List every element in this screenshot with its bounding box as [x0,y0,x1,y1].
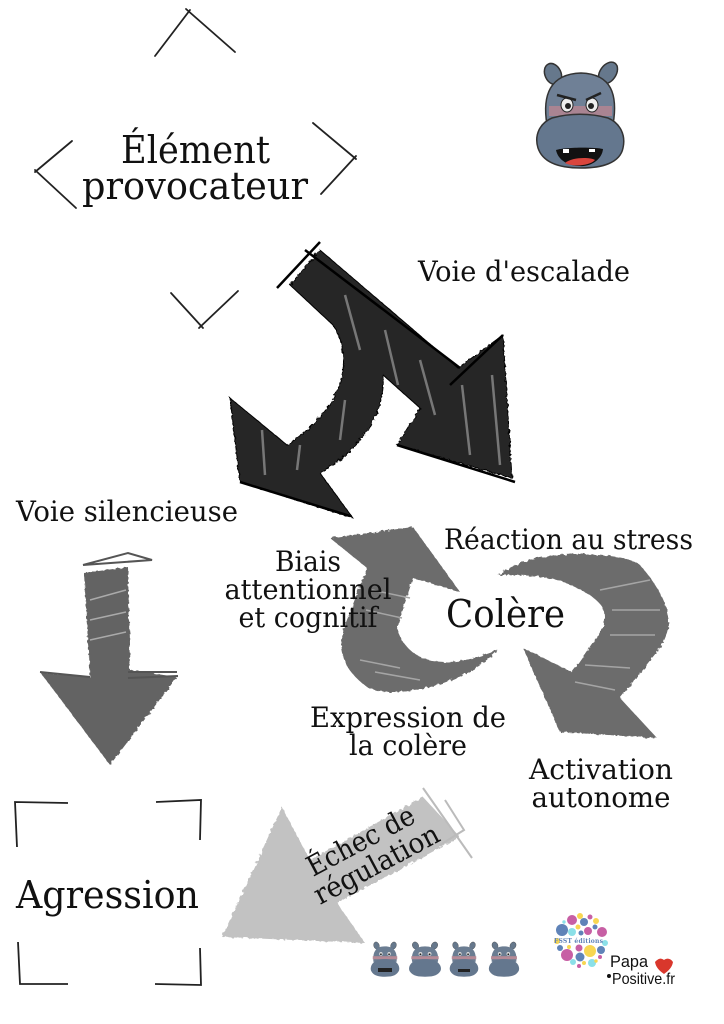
label: Biais attentionnel et cognitif [224,545,392,634]
label: Échec de régulation: Échec de [301,799,420,883]
title: Élément provocateur: provocateur [82,164,309,208]
title: Élément provocateur [82,128,309,208]
arrow: black split arrow [230,242,515,518]
arrow: dark grey down arrow [40,553,178,765]
icon: angry hippo [537,59,624,168]
label: Biais attentionnel et cognitif: attentionnel [224,573,392,606]
logo: FSST editions bubbles [554,913,608,968]
label: Activation autonome: autonome [532,781,670,814]
label: Activation autonome [528,753,673,814]
logo: Papa Positive: Papa [610,952,649,971]
label: Réaction au stress: Réaction au stress [444,523,693,556]
heading: Agression: Agression [15,873,199,917]
label: Activation autonome: Activation [528,753,673,786]
logo: FSST editions bubbles: FSST éditions [554,938,604,945]
label: Expression de la colère: la colère [349,729,467,762]
label: Échec de régulation: régulation [308,817,445,911]
icons: row of four hippos [371,941,519,977]
logo: Papa Positive: Positive.fr [612,971,676,988]
label: Colère: Colère [446,592,565,636]
title: Élément provocateur: Élément [121,128,270,172]
title frame: diamond strokes around Élément provocateur [35,9,356,328]
label: Expression de la colère: Expression de [310,701,506,734]
arrow: Réaction au stress cycle arrow [498,554,669,738]
label: Expression de la colère [310,701,506,762]
label: Voie silencieuse: Voie silencieuse [15,495,238,528]
arrow: Biais attentionnel cycle arrow [330,527,498,692]
arrow: pale grey failure arrow [222,788,472,943]
frame: Agression corner brackets [15,800,201,985]
label: Voie d'escalade: Voie d'escalade [417,255,630,288]
label: Biais attentionnel et cognitif: Biais [275,545,341,578]
label: Biais attentionnel et cognitif: et cognitif [238,601,380,634]
logo: Papa Positive [607,952,676,988]
